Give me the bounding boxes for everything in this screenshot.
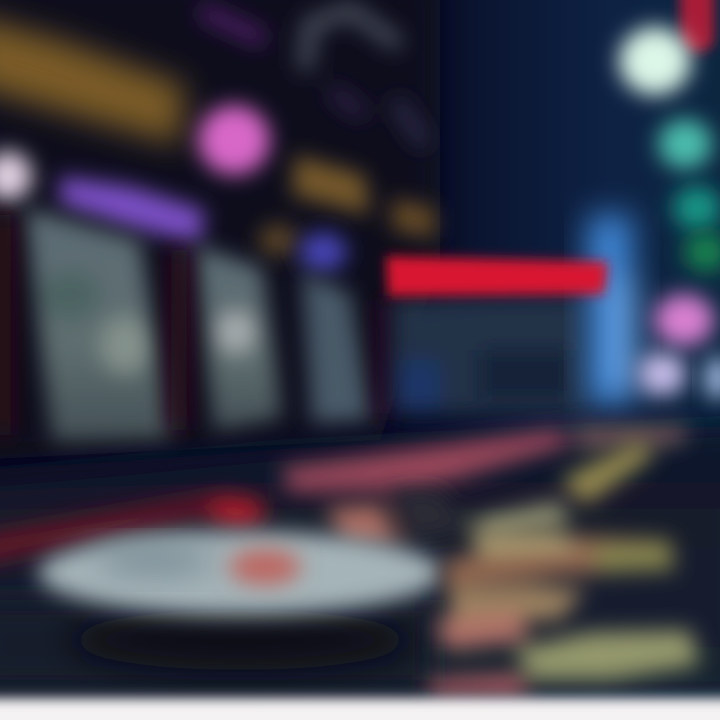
- road: dark lower shade: [0, 600, 430, 690]
- building: left facade: [0, 0, 440, 460]
- band: purple neon: [60, 176, 205, 244]
- window: large left panel: [25, 208, 172, 442]
- light: white lamp at left edge: [0, 151, 32, 201]
- light: blue-violet glow: [299, 232, 347, 272]
- light: red top: [680, 0, 714, 52]
- road: red reflections: [0, 425, 690, 565]
- light: pink glow: [198, 105, 270, 175]
- light: pale blue: [705, 356, 720, 400]
- top structure: grey and violet lights: [200, 10, 425, 145]
- light: pale lavender: [638, 352, 686, 396]
- road: yellow stripes: [325, 440, 655, 545]
- column: blue light: [588, 215, 636, 405]
- window: middle panel: [195, 245, 282, 432]
- plate: silver dish: [38, 531, 442, 670]
- accents: red door frames: [0, 215, 390, 435]
- sign: amber top-left: [0, 15, 185, 145]
- plate body: [38, 531, 442, 615]
- light: teal upper: [658, 119, 712, 169]
- sign: red banner: [386, 256, 608, 296]
- road: ground surface: [0, 425, 720, 700]
- window: right panel: [302, 272, 372, 424]
- storefront: lower shop: [392, 298, 590, 413]
- strip: white bottom edge: [0, 698, 720, 720]
- plate red accent: [229, 549, 301, 585]
- plate shadow: [70, 610, 410, 670]
- lights: right side bokeh: [619, 0, 720, 400]
- lights: amber building signs: [258, 155, 435, 256]
- food: colorful strips: [430, 530, 700, 695]
- light: teal middle: [673, 186, 720, 230]
- light: green lower: [684, 232, 720, 272]
- light: white green: [619, 27, 691, 95]
- light: pink: [654, 294, 714, 346]
- plate highlight: [95, 544, 215, 576]
